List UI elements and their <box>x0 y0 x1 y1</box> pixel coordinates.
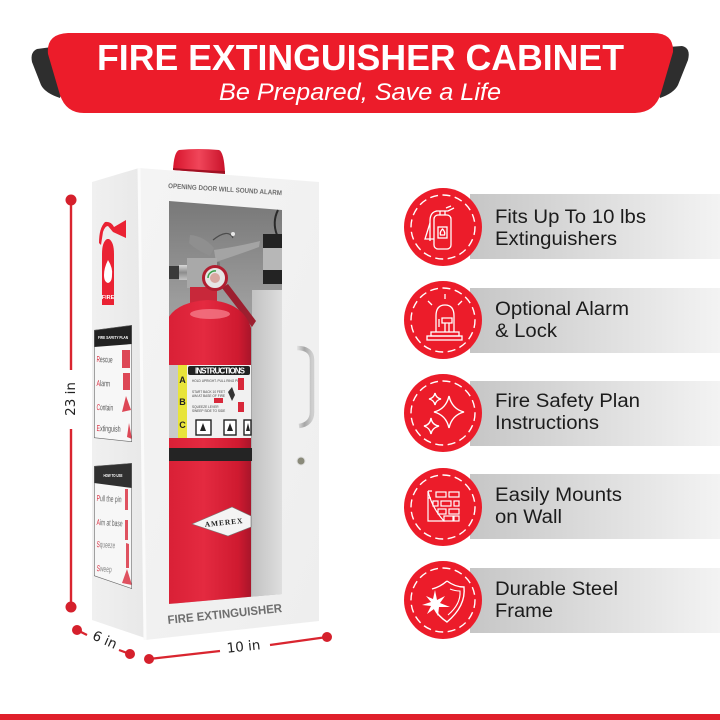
how to use sticker: HOW TO USE <box>104 473 122 478</box>
fire safety plan sticker: Rescue <box>96 354 113 365</box>
feature text: Instructions <box>495 413 599 434</box>
fire safety plan sticker: FIRE SAFETY PLAN <box>98 335 128 340</box>
feature: fire safety plan <box>404 374 720 452</box>
depth dimension: 6 in <box>72 625 135 659</box>
amerex brand diamond <box>192 507 251 536</box>
fire safety plan sticker: Contain <box>96 402 113 413</box>
header banner <box>32 33 689 113</box>
bottom red strip <box>0 714 720 720</box>
door alarm notice: OPENING DOOR WILL SOUND ALARM <box>168 183 282 197</box>
title: FIRE EXTINGUISHER CABINET <box>97 37 624 78</box>
cabinet window interior <box>165 198 285 608</box>
width dimension: 10 in: 10 in <box>226 637 261 657</box>
instruction label: START BACK 10 FEET <box>192 390 225 394</box>
feature text: on Wall <box>495 507 562 528</box>
instruction label: A <box>179 375 186 385</box>
feature: extinguisher capacity <box>404 188 720 266</box>
icon: brick wall <box>428 491 459 521</box>
cabinet front panel <box>139 168 319 640</box>
alarm device <box>263 210 283 284</box>
banner right ribbon tab <box>650 46 689 98</box>
extinguisher hose and valve <box>165 258 217 303</box>
feature bar <box>470 474 720 539</box>
instruction label: C <box>179 420 186 430</box>
badge <box>404 281 482 359</box>
feature: wall mounting <box>404 468 720 546</box>
instruction label: AIM AT BASE OF FIRE <box>192 394 225 398</box>
door lock <box>297 457 305 465</box>
fire sign: FIRE <box>102 295 115 301</box>
subtitle: Be Prepared, Save a Life <box>219 79 501 106</box>
how to use sticker <box>94 463 132 589</box>
icon: alarm beacon <box>427 294 462 340</box>
instruction label: SWEEP SIDE TO SIDE <box>192 409 225 413</box>
extinguisher lower lever <box>222 284 256 327</box>
extinguisher black band <box>165 448 252 461</box>
fire sign <box>99 220 126 305</box>
feature text: Fits Up To 10 lbs <box>495 207 646 228</box>
body highlight <box>190 309 230 319</box>
alarm beacon <box>173 149 225 174</box>
feature: alarm and lock <box>404 281 720 359</box>
badge <box>404 188 482 266</box>
feature text: Extinguishers <box>495 229 617 250</box>
instruction label: SQUEEZE LEVER <box>192 405 219 409</box>
feature: durable steel frame <box>404 561 720 639</box>
feature bar <box>470 381 720 446</box>
cabinet <box>92 149 319 640</box>
door handle <box>297 348 312 426</box>
extinguisher gauge <box>204 266 226 290</box>
fire safety plan sticker <box>94 325 132 442</box>
how to use sticker: Pull the pin <box>96 493 122 504</box>
instruction label <box>165 365 251 438</box>
feature text: Easily Mounts <box>495 485 622 506</box>
icon: shield with spark <box>422 581 464 622</box>
depth dimension: 6 in: 6 in <box>90 628 119 653</box>
cabinet side panel <box>92 168 145 638</box>
instruction label: B <box>179 397 186 407</box>
height dimension: 23 in <box>63 194 79 612</box>
width dimension: 10 in <box>144 632 332 664</box>
feature bar <box>470 568 720 633</box>
feature text: Durable Steel <box>495 579 618 600</box>
how to use sticker: Aim at base <box>96 517 123 528</box>
fire safety plan sticker: Extinguish <box>96 423 121 434</box>
badge <box>404 374 482 452</box>
icon: extinguisher <box>425 206 454 249</box>
extinguisher handle levers <box>190 232 260 266</box>
extinguisher body <box>165 300 251 604</box>
feature bar <box>470 288 720 353</box>
feature text: & Lock <box>495 321 558 342</box>
feature text: Frame <box>495 601 553 622</box>
feature text: Optional Alarm <box>495 299 629 320</box>
instruction label: INSTRUCTIONS <box>195 366 246 376</box>
feature bar <box>470 194 720 259</box>
feature text: Fire Safety Plan <box>495 391 640 412</box>
badge <box>404 561 482 639</box>
badge <box>404 468 482 546</box>
how to use sticker: Squeeze <box>96 539 116 550</box>
banner left ribbon tab <box>32 47 70 98</box>
icon: sparkles <box>424 393 464 434</box>
amerex brand diamond: AMEREX <box>204 516 244 529</box>
instruction label: HOLD UPRIGHT. PULL RING PIN. <box>192 379 241 383</box>
fire safety plan sticker: Alarm <box>96 378 110 388</box>
banner red plate <box>48 33 673 113</box>
how to use sticker: Sweep <box>96 563 112 574</box>
cabinet label: FIRE EXTINGUISHER <box>167 601 283 627</box>
height dimension: 23 in: 23 in <box>63 382 79 416</box>
